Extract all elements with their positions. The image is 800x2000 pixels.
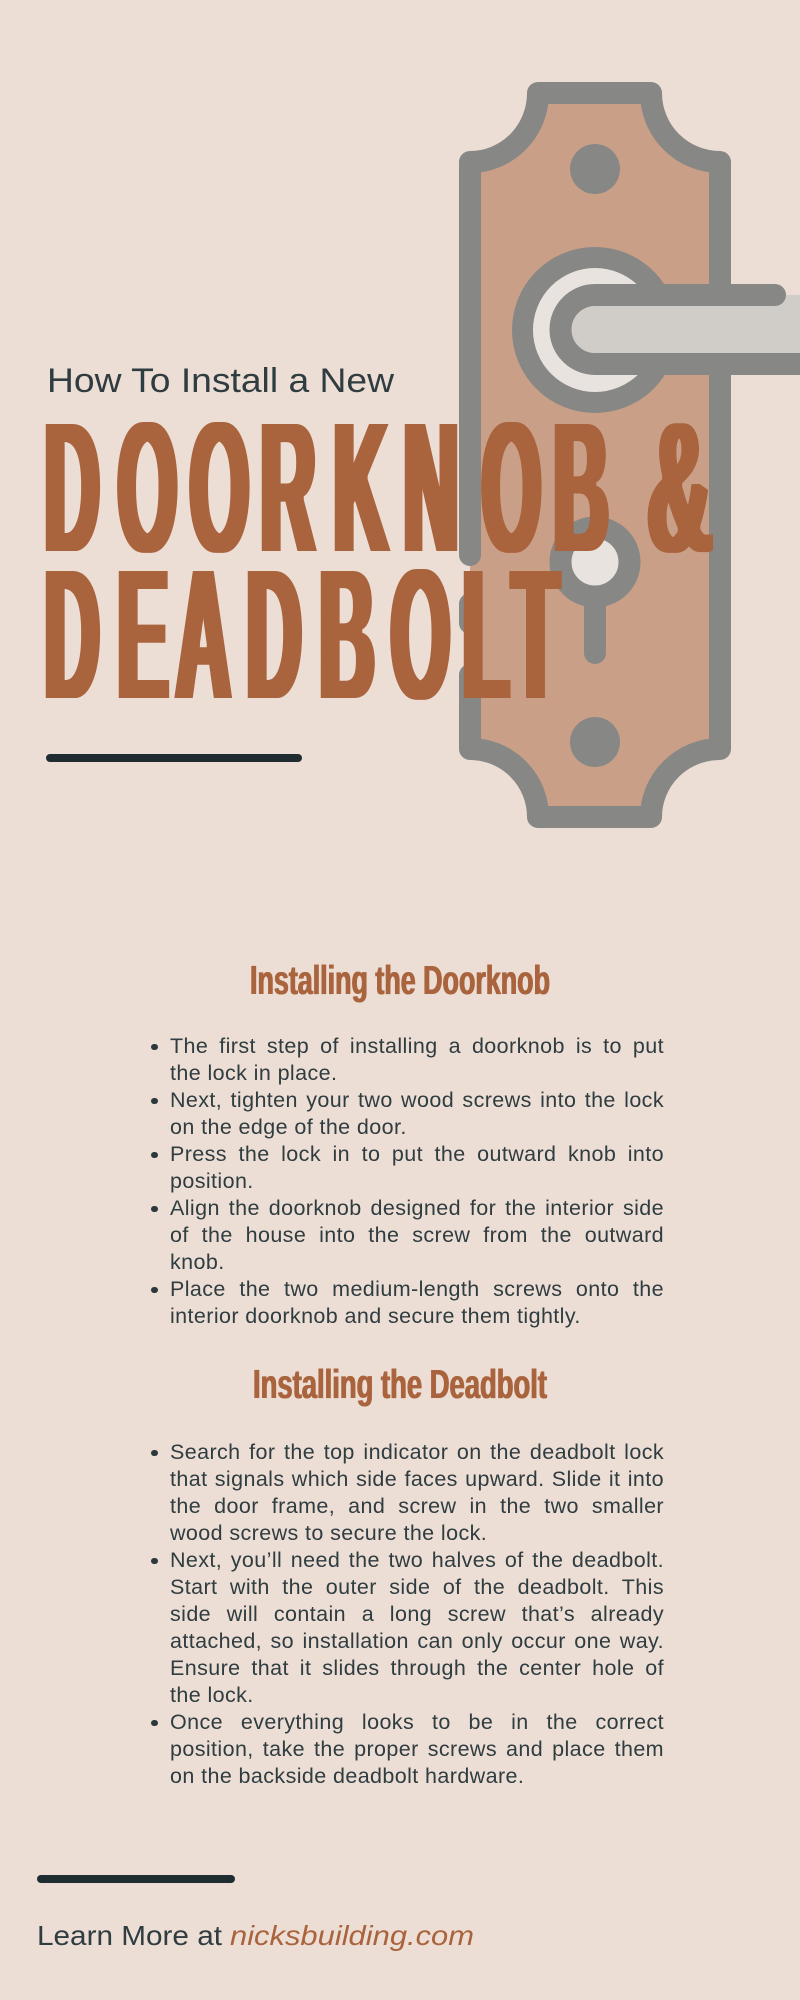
title: doorknob and deadbolt: & [648,382,712,593]
step [170,1547,664,1709]
plate fill [470,93,720,817]
step [170,1033,664,1087]
bottom screw [570,717,620,767]
heading: installing the deadbolt: Installing the Deadbolt [253,1361,547,1407]
keyhole [560,528,630,653]
step: knob. [170,1250,225,1274]
list: doorknob steps [151,1034,664,1328]
title: doorknob and deadbolt [45,382,712,740]
step: on the edge of the door. [170,1115,407,1139]
step: position. [170,1169,254,1193]
step: interior doorknob and secure them tightly. [170,1304,581,1328]
step: Align the doorknob designed for the interior side [170,1196,664,1220]
step: Ensure that it slides through the center hole of [170,1656,664,1680]
panel: installing the deadbolt [151,1361,664,1788]
heading: installing the doorknob: Installing the Doorknob [250,957,550,1003]
step: Place the two medium-length screws onto the [170,1277,664,1301]
step: The first step of installing a doorknob is to put [170,1034,664,1058]
step: position, take the proper screws and place them [170,1737,664,1761]
step: Once everything looks to be in the correct [170,1710,664,1734]
list: deadbolt steps [151,1440,664,1788]
divider bar: footer [37,1875,235,1883]
step: on the backside deadbolt hardware. [170,1764,524,1788]
step: that signals which side faces upward. Slide it into [170,1467,664,1491]
step [170,1087,664,1141]
step: Next, you’ll need the two halves of the deadbolt. [170,1548,664,1572]
icon: door lever and lock plate [470,93,800,817]
step: Press the lock in to put the outward knob into [170,1142,664,1166]
step [170,1276,664,1330]
panel: installing the doorknob [151,957,664,1328]
step: the lock in place. [170,1061,337,1085]
lever rosette [522,258,668,402]
step: Search for the top indicator on the deadbolt lock [170,1440,664,1464]
title: how to install: How To Install a New [47,362,394,400]
footer label: Learn More at [37,1920,222,1951]
step [170,1439,664,1547]
step: attached, so installation can only occur one way. [170,1629,664,1653]
step: wood screws to secure the lock. [170,1521,487,1545]
step: the lock. [170,1683,254,1707]
divider bar: title [46,754,302,762]
step: of the house into the screw from the outward [170,1223,664,1247]
panel: hero [45,82,800,828]
step: Next, tighten your two wood screws into the lock [170,1088,664,1112]
footer link: nicksbuilding.com [230,1920,474,1951]
step [170,1195,664,1276]
plate outline [470,93,720,817]
step: Start with the outer side of the deadbolt. This [170,1575,664,1599]
step: the door frame, and screw in the two smaller [170,1494,664,1518]
step [170,1709,664,1790]
title: doorknob and deadbolt: DEADBOLT [45,529,559,740]
top screw [570,144,620,194]
title: doorknob and deadbolt: DOORKNOB [45,382,608,593]
lever outline [561,295,800,364]
lever fill [571,295,800,353]
step: side will contain a long screw that’s already [170,1602,664,1626]
step [170,1141,664,1195]
